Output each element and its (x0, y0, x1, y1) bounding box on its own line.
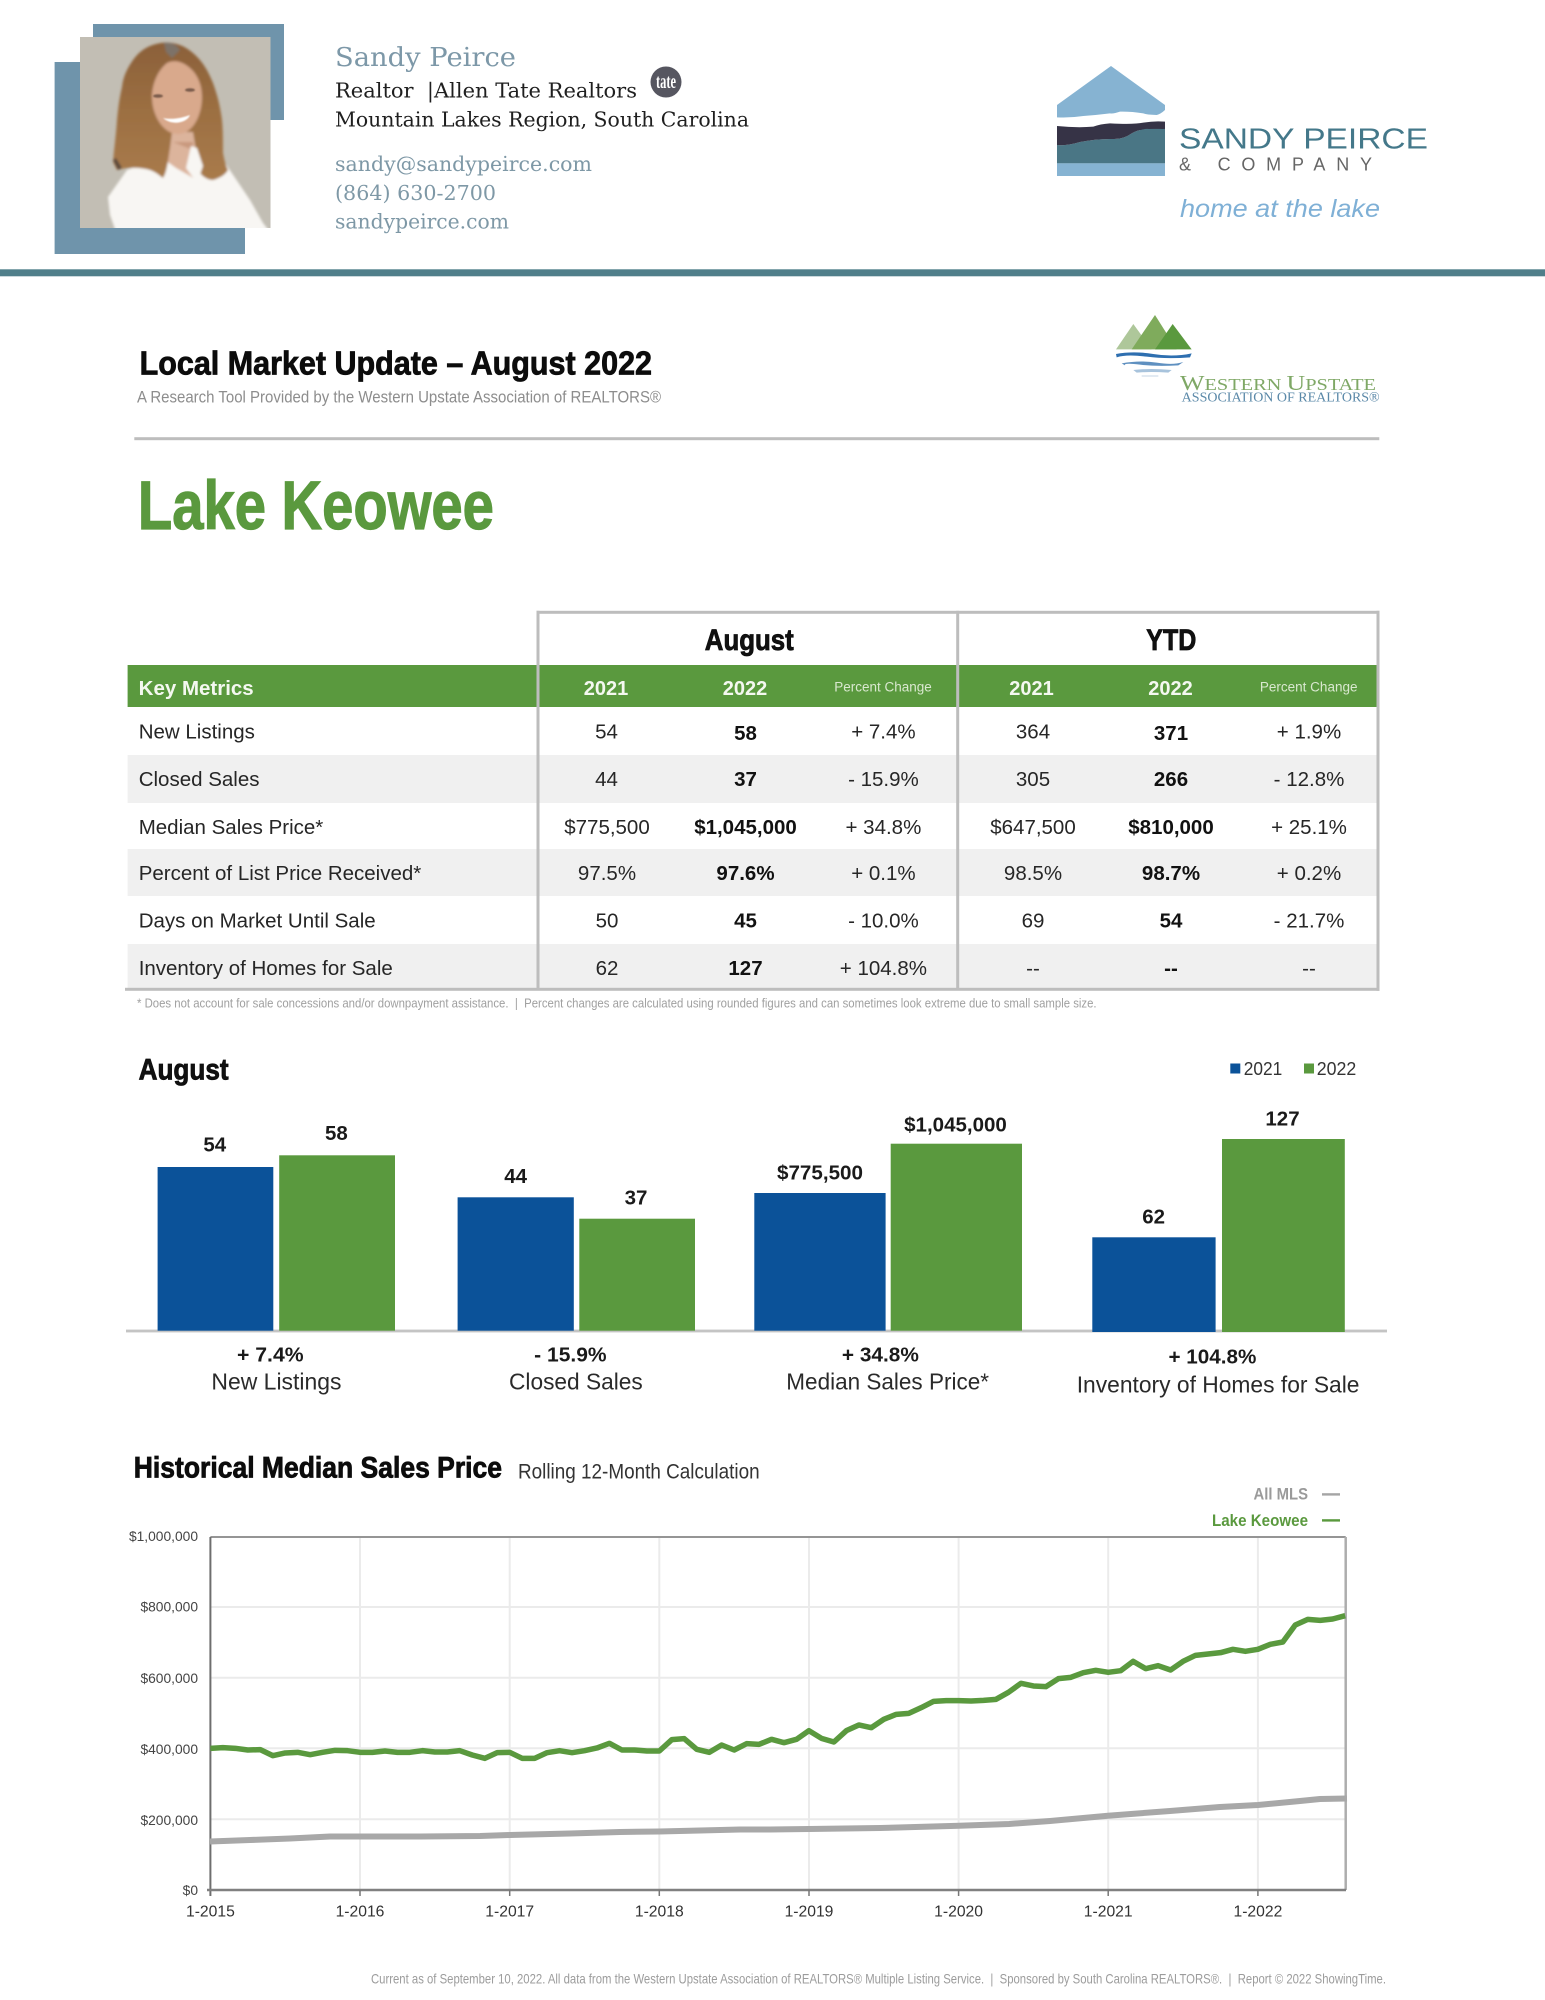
logo text line one: W ESTERN UPSTATE (1180, 371, 1376, 395)
group: Median Sales Price (754, 1114, 1022, 1394)
agent email: sandy@sandypeirce.com (335, 152, 592, 176)
line chart legend: All MLS (1254, 1485, 1308, 1503)
bar chart legend: 2021 (1244, 1059, 1282, 1079)
group: Closed Sales: 44 (504, 1165, 528, 1188)
line chart legend: Lake Keowee (1212, 1512, 1308, 1530)
group: Closed Sales: 37 (625, 1186, 647, 1209)
logo tagline: home at the lake (1180, 195, 1380, 223)
group: Median Sales Price: + 34.8% (842, 1344, 919, 1367)
series: All MLS (210, 1798, 1347, 1842)
logo subline: & COMPANY (1179, 155, 1372, 175)
group: Closed Sales (458, 1165, 695, 1394)
row: New Listings: 54 (595, 720, 618, 743)
group: Inventory of Homes (1077, 1107, 1360, 1398)
agent phone: (864) 630-2700 (335, 181, 496, 205)
group: Median Sales Price: Median Sales Price* (786, 1368, 989, 1394)
logo: Western Upstate Association of Realtors (1116, 315, 1380, 405)
series: Lake Keowee (210, 1616, 1345, 1758)
row: Days on Market Until Sale (139, 910, 1344, 933)
table footnote: * Does not account for sale concessions and/or downpayment assistance. | Percent changes are calculated using rounded figures and can sometimes look extreme due to small sample size. (137, 996, 1097, 1010)
group: Median Sales Price: $1,045,000 (904, 1114, 1007, 1137)
row: Inventory of Homes for Sale: -- (1026, 957, 1040, 980)
row: Inventory of Homes for Sale: 127 (728, 957, 763, 980)
agent region: Mountain Lakes Region, South Carolina (335, 108, 749, 132)
title: Local Market Update: Local Market Update – August 2022 (140, 345, 652, 382)
row: Days on Market Until Sale: 50 (596, 910, 618, 933)
y axis labels: $1,000,000 (129, 1529, 198, 1544)
header labels: 2021 (584, 678, 628, 700)
chart gridlines (210, 1537, 1346, 1890)
row: Days on Market Until Sale: 54 (1160, 910, 1183, 933)
heading: Historical Median Sales Price: Historical Median Sales Price (134, 1451, 502, 1484)
x axis labels: 1-2016 (336, 1904, 385, 1921)
agent name: Sandy Peirce (335, 43, 516, 73)
agent contact text (335, 43, 749, 234)
row: Median Sales Price: + 25.1% (1271, 816, 1347, 839)
group: New Listings: 58 (325, 1122, 348, 1145)
row: Closed Sales: - 12.8% (1274, 768, 1344, 791)
row: New Listings: + 7.4% (851, 720, 916, 743)
x axis labels: 1-2021 (1084, 1904, 1133, 1921)
row: Median Sales Price: $647,500 (990, 816, 1076, 839)
row: Closed Sales: 44 (595, 768, 618, 791)
group: New Listings: + 7.4% (237, 1344, 304, 1367)
bar chart legend: 2022 (1317, 1059, 1356, 1079)
agent role: Realtor |Allen Tate Realtors (335, 78, 637, 103)
bar chart: August (126, 1053, 1387, 1398)
row: Closed Sales: Closed Sales (139, 768, 259, 791)
row: New Listings: + 1.9% (1277, 720, 1341, 743)
group: Inventory of Homes: + 104.8% (1168, 1345, 1256, 1368)
section rule (134, 437, 1379, 440)
logo: Sandy Peirce and Company (1057, 66, 1428, 223)
line chart: historical median sales price (129, 1529, 1347, 1921)
row: Inventory of Homes for Sale (139, 957, 1316, 980)
row: Percent of List Price Received: + 0.1% (851, 862, 916, 885)
x axis labels: 1-2019 (785, 1904, 833, 1921)
row: Days on Market Until Sale: - 21.7% (1274, 910, 1344, 933)
row: Days on Market Until Sale: Days on Market Until Sale (139, 910, 376, 933)
row: Inventory of Homes for Sale: 62 (596, 957, 618, 980)
group: New Listings (158, 1122, 395, 1394)
icon: mountains and water (1116, 315, 1192, 377)
y axis labels: $200,000 (140, 1813, 198, 1828)
header labels: 2021 (1009, 678, 1054, 700)
y axis labels (129, 1529, 198, 1898)
row: Percent of List Price Received: 98.7% (1142, 862, 1200, 885)
row: Inventory of Homes for Sale: + 104.8% (840, 957, 927, 980)
group: Closed Sales: - 15.9% (534, 1344, 607, 1367)
row: Inventory of Homes for Sale: Inventory of Homes for Sale (139, 957, 393, 980)
row: New Listings: 364 (1016, 720, 1050, 743)
header: agent photo with offset frames (55, 24, 284, 254)
group: Closed Sales: Closed Sales (509, 1368, 643, 1394)
key metrics table (125, 611, 1380, 991)
row: New Listings: 371 (1154, 722, 1188, 745)
row: Median Sales Price: $775,500 (564, 816, 650, 839)
row: Percent of List Price Received: 97.6% (716, 862, 775, 885)
icon: house with lake (1057, 66, 1165, 176)
row: Percent of List Price Received: + 0.2% (1277, 862, 1341, 885)
x axis labels: 1-2020 (934, 1904, 983, 1921)
row: Percent of List Price Received: 97.5% (578, 862, 636, 885)
agent website: sandypeirce.com (335, 210, 509, 234)
row: Median Sales Price: + 34.8% (846, 816, 921, 839)
x axis labels: 1-2018 (635, 1904, 684, 1921)
header labels: Percent Change (834, 680, 932, 695)
header labels: 2022 (1148, 678, 1193, 700)
row: Percent of List Price Received: 98.5% (1004, 862, 1062, 885)
row: Median Sales Price (139, 816, 1347, 839)
logo wordmark: SANDY PEIRCE (1179, 123, 1428, 155)
y axis labels: $400,000 (140, 1742, 198, 1757)
row: Closed Sales: 266 (1154, 768, 1188, 791)
heading: Lake Keowee: Lake Keowee (138, 467, 494, 544)
row: Median Sales Price: $1,045,000 (694, 816, 797, 839)
row: Percent of List Price Received: Percent of List Price Received* (139, 862, 421, 885)
row: Inventory of Homes for Sale: -- (1302, 957, 1316, 980)
chart frame (207, 1537, 1346, 1896)
row: Days on Market Until Sale: - 10.0% (848, 910, 919, 933)
x axis labels: 1-2015 (186, 1904, 235, 1921)
group: New Listings: 54 (203, 1134, 227, 1157)
logo text line two: ASSOCIATION OF REALTORS® (1182, 390, 1380, 405)
line chart legend (1212, 1485, 1340, 1530)
bar chart heading: August (139, 1053, 229, 1086)
row: New Listings: 58 (734, 722, 757, 745)
group: Median Sales Price: $775,500 (777, 1161, 863, 1184)
row: Inventory of Homes for Sale: -- (1164, 957, 1178, 980)
icon: Allen Tate badge (650, 66, 682, 98)
row: Median Sales Price: $810,000 (1128, 816, 1214, 839)
y axis labels: $800,000 (140, 1600, 198, 1615)
group: Inventory of Homes: 62 (1142, 1206, 1165, 1229)
row: New Listings (139, 720, 1341, 745)
table frame (125, 611, 1380, 991)
x axis labels: 1-2022 (1233, 1904, 1282, 1921)
icon: Allen Tate badge: tate (656, 71, 676, 93)
row: Closed Sales (139, 768, 1344, 791)
row: Closed Sales: - 15.9% (848, 768, 919, 791)
subheading: rolling calculation: Rolling 12-Month Calculation (518, 1459, 760, 1483)
row: Closed Sales: 37 (734, 768, 757, 791)
x axis labels (186, 1904, 1282, 1921)
axis line (126, 1330, 1387, 1332)
subtitle: A Research Tool Provided by the Western Upstate Association of REALTORS® (137, 388, 662, 407)
y axis labels: $600,000 (140, 1671, 198, 1686)
header divider (0, 269, 1545, 276)
row: Percent of List Price Received (139, 862, 1341, 885)
bar chart legend (1230, 1059, 1356, 1079)
row: Median Sales Price: Median Sales Price* (139, 816, 323, 839)
header labels: 2022 (723, 678, 767, 700)
header labels: Key Metrics (139, 678, 254, 700)
row: Days on Market Until Sale: 45 (734, 910, 757, 933)
period heading: YTD: YTD (1146, 624, 1196, 657)
row: Days on Market Until Sale: 69 (1022, 910, 1044, 933)
table header band (128, 665, 1378, 707)
group: Inventory of Homes: Inventory of Homes for Sale (1077, 1372, 1360, 1398)
row: Closed Sales: 305 (1016, 768, 1050, 791)
y axis labels: $0 (183, 1883, 198, 1898)
x axis labels: 1-2017 (485, 1904, 534, 1921)
period heading: August: August (705, 624, 794, 657)
header labels (139, 678, 1357, 700)
row: New Listings: New Listings (139, 720, 255, 743)
group: New Listings: New Listings (211, 1368, 342, 1394)
group: Inventory of Homes: 127 (1265, 1107, 1300, 1130)
header labels: Percent Change (1260, 680, 1357, 695)
row bands (128, 755, 1378, 988)
